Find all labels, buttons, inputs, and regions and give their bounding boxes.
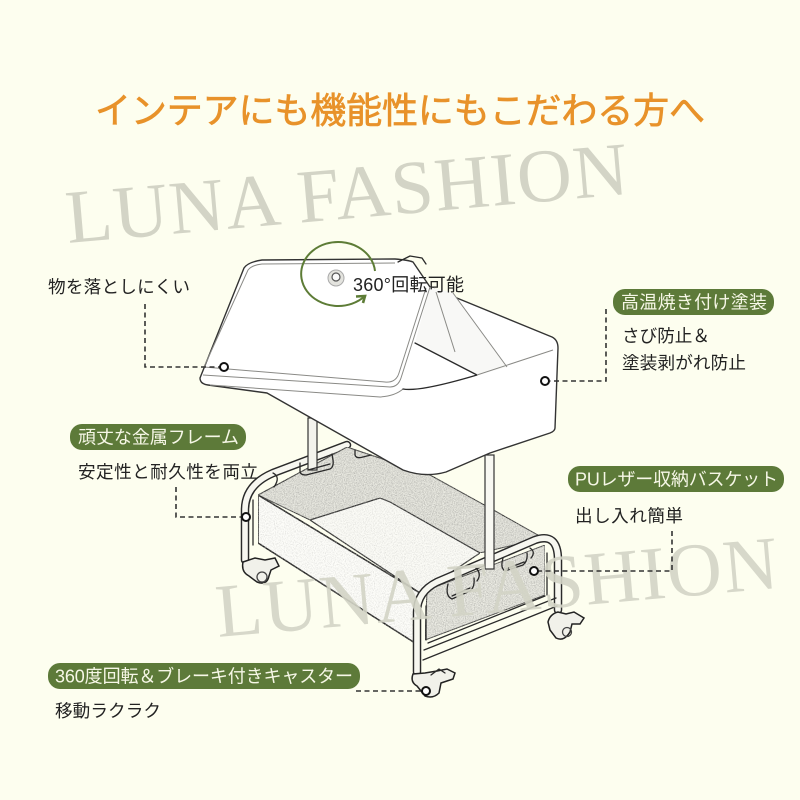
- watermark: top: LUNA FASHION: [62, 127, 631, 260]
- pill heading: 高温焼き付け塗装: [621, 292, 767, 312]
- caster: front right: [548, 612, 584, 639]
- marker: [242, 513, 250, 521]
- product illustration: lower frame and basket: [243, 418, 584, 697]
- leader line: [538, 531, 672, 571]
- pill heading: [613, 289, 774, 315]
- marker: [220, 363, 228, 371]
- strap handles: [273, 450, 533, 599]
- pill heading: 頑丈な金属フレーム: [78, 428, 239, 448]
- poles: [308, 418, 494, 569]
- icon: green rotation arrow: [301, 242, 375, 306]
- basket: front panel: [425, 545, 545, 640]
- callout: 頑丈な金属フレーム: [70, 424, 258, 521]
- product illustration: upper bassinet: [200, 256, 558, 475]
- callout: 高温焼き付け塗装: [541, 289, 774, 385]
- watermark: bottom: LUNA FASHION: [212, 521, 781, 654]
- knob: [328, 270, 344, 286]
- front bottom rail: [423, 596, 557, 660]
- pill heading: PUレザー収納バスケット: [575, 470, 778, 490]
- callout: 360度回転＆ブレーキ付きキャスター: [48, 663, 430, 721]
- text: coating description: 塗装剥がれ防止: [622, 353, 746, 373]
- lid edges: [203, 256, 553, 397]
- caster: front: [412, 669, 455, 697]
- text: 物を落としにくい: 物を落としにくい: [48, 277, 190, 297]
- basket: floor: [310, 498, 480, 593]
- basket: left side panel: [258, 495, 420, 643]
- caster: rear left: [243, 558, 279, 583]
- callout: 物を落としにくい: [48, 277, 228, 371]
- leader line: [356, 690, 422, 692]
- title: インテアにも機能性にもこだわる方へ: [95, 90, 705, 131]
- text: coating description: [622, 326, 746, 373]
- text: caster description: 移動ラクラク: [55, 701, 161, 721]
- marker: [541, 377, 549, 385]
- pill heading: 360度回転＆ブレーキ付きキャスター: [55, 666, 353, 686]
- basket: interior back wall: [258, 447, 543, 553]
- text: coating description: さび防止＆: [622, 326, 710, 346]
- front frame tube: [417, 538, 558, 672]
- rear top rail: [245, 445, 347, 560]
- interior view: [415, 287, 507, 375]
- marker: [530, 567, 538, 575]
- text: frame description: 安定性と耐久性を両立: [78, 462, 258, 482]
- text: basket description: 出し入れ簡単: [575, 506, 683, 526]
- callout: PUレザー収納バスケット: [530, 466, 784, 575]
- marker: [422, 687, 430, 695]
- label: rotation: 360°回転可能: [353, 275, 464, 295]
- bassinet body: [200, 259, 558, 475]
- leader line: [550, 309, 606, 381]
- leader line: [145, 304, 220, 367]
- leader line: [176, 487, 242, 517]
